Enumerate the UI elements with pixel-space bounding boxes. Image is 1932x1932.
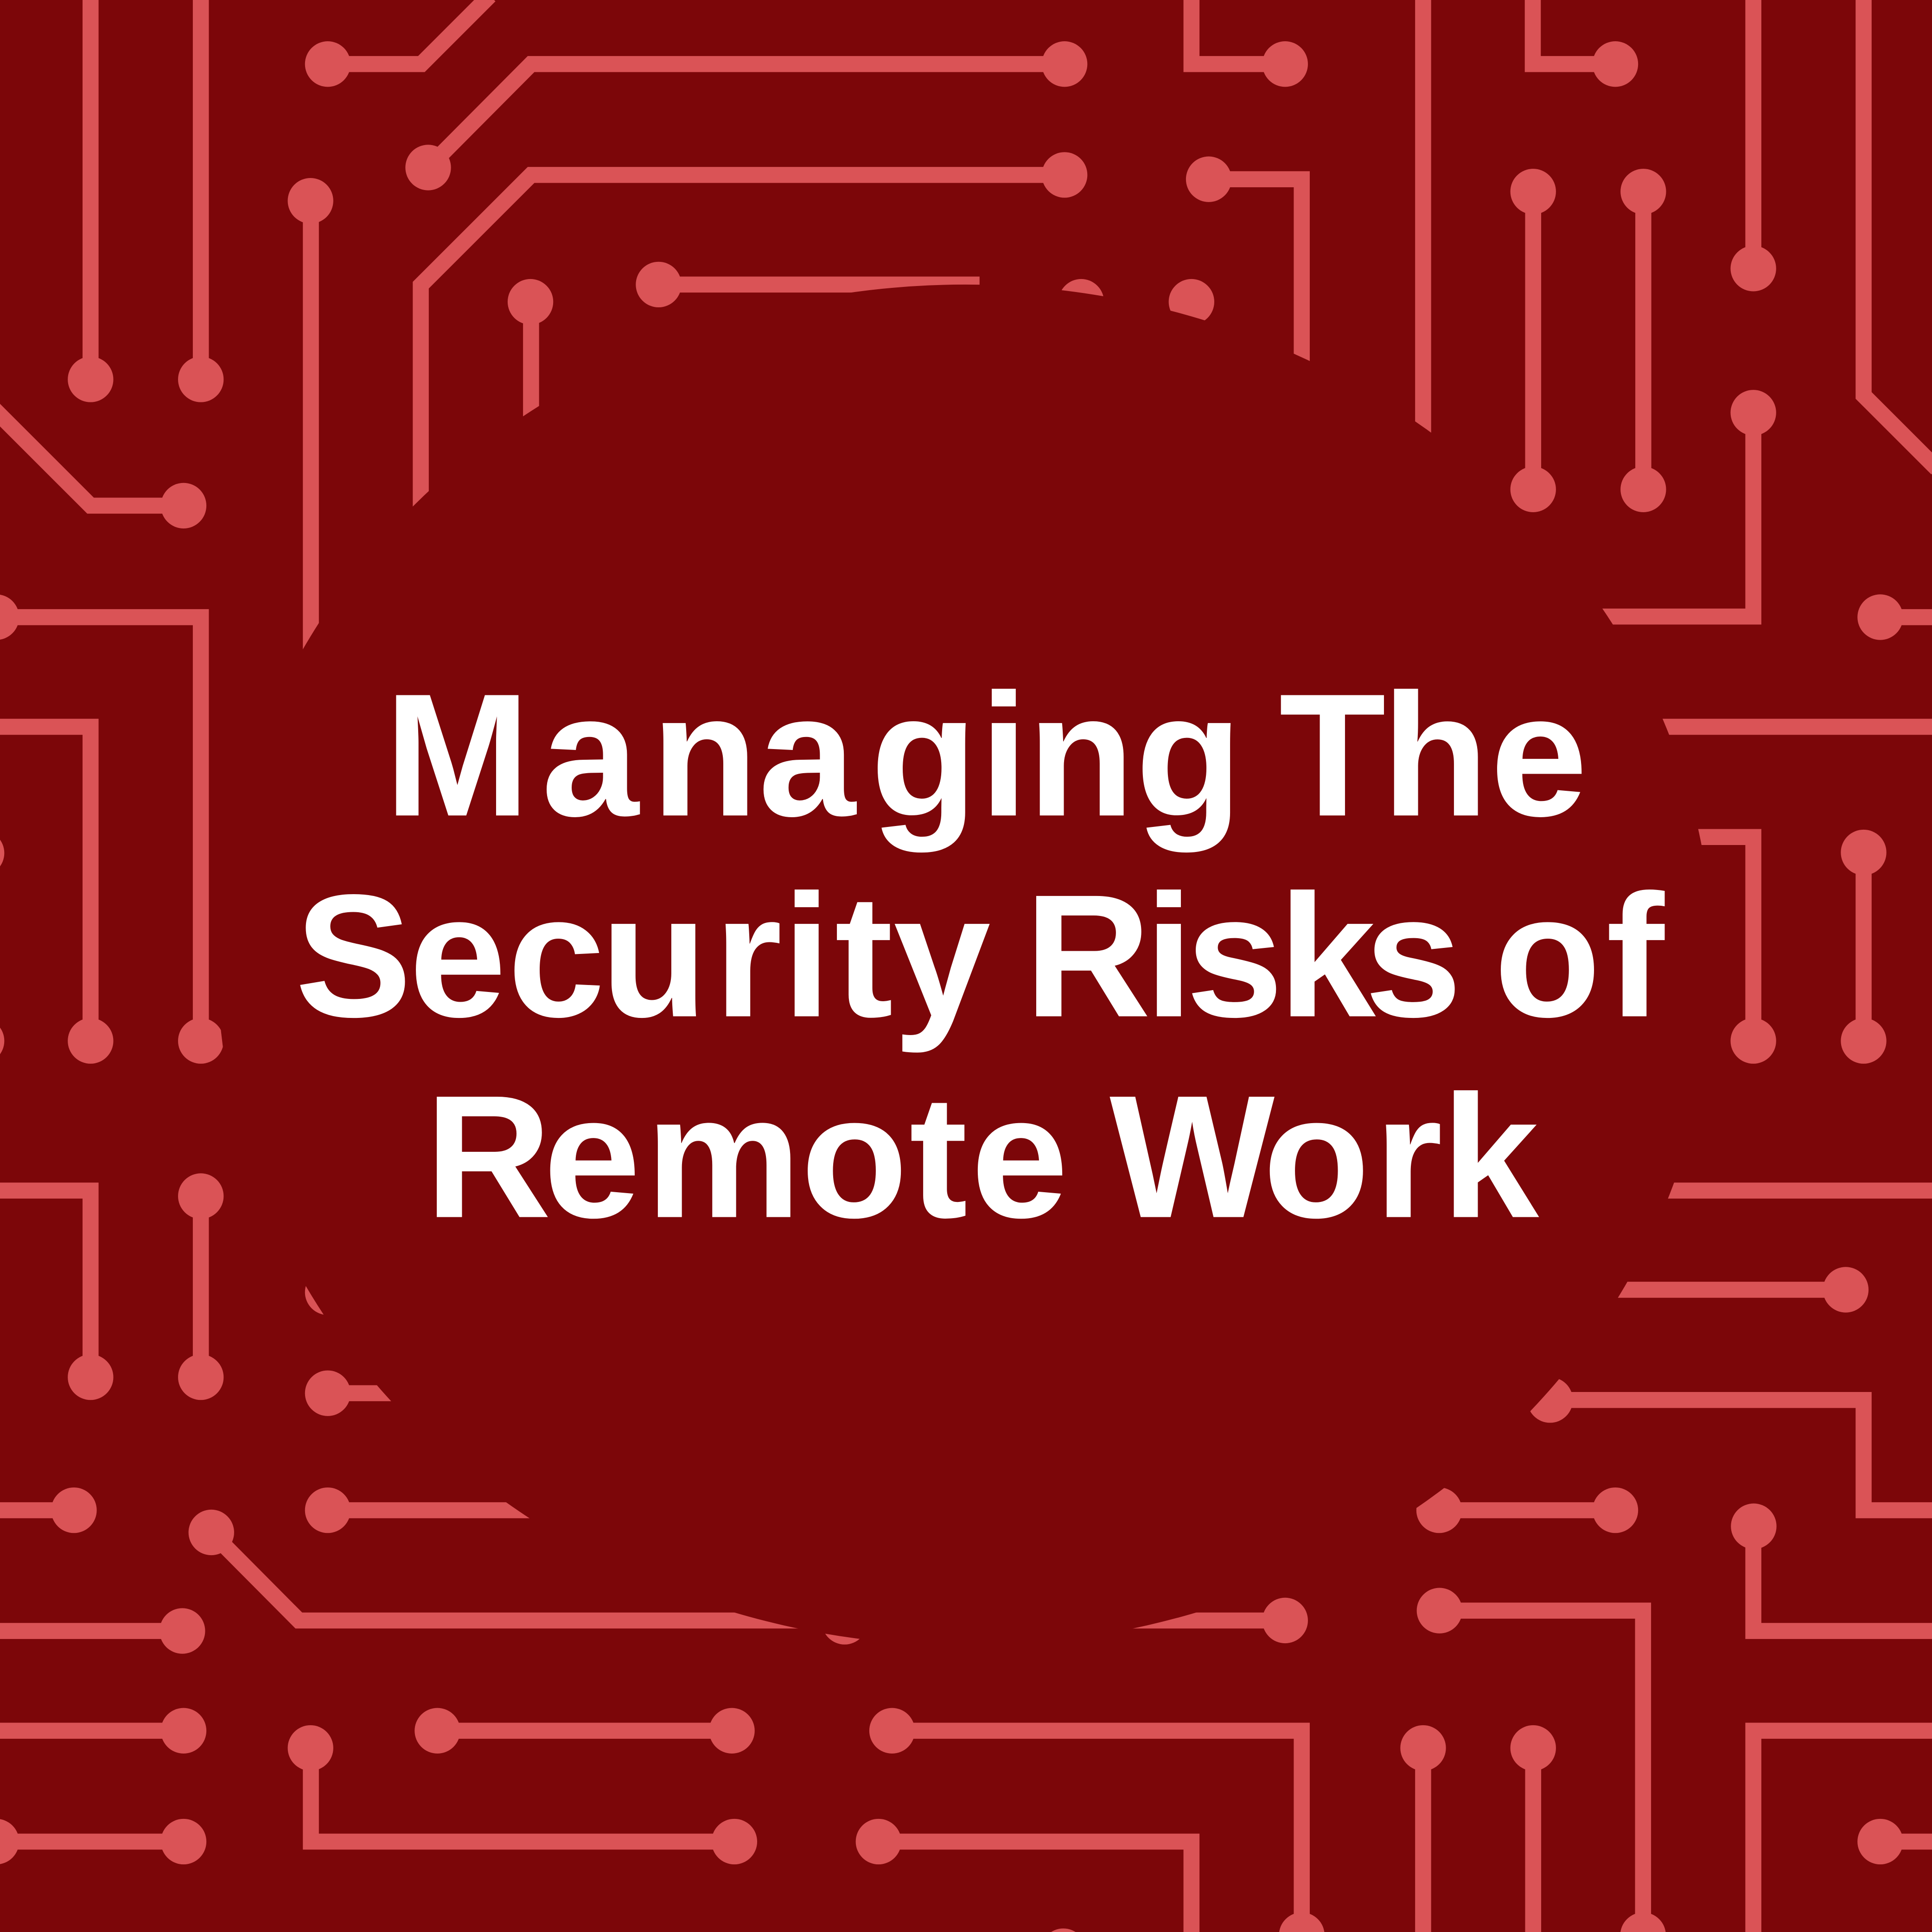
trace: bottom-left double-ended (0, 1819, 206, 1864)
trace: bottom vertical 1 (1400, 1725, 1446, 1932)
node: clipped dot lower left (305, 1270, 351, 1315)
trace: right elbow down (1602, 837, 1776, 1064)
trace: right elbow to centre (1516, 390, 1776, 616)
trace: clipped stub lower left 1 (305, 1370, 493, 1416)
trace: lower right double-ended (1416, 1487, 1638, 1533)
trace: left large elbow (0, 594, 223, 1064)
trace: top vertical clipped (1420, 0, 1426, 517)
trace: left long stub 2 (0, 1708, 206, 1754)
title line 2 (295, 858, 1666, 1055)
trace: top long diagonal 2 (421, 152, 1087, 566)
node: lower end of double-ended vertical 1 (1511, 467, 1556, 512)
trace: bottom elbow right 1 (869, 1708, 1325, 1932)
trace: right step (1527, 1377, 1932, 1510)
trace: top-left vertical 2 (178, 0, 223, 402)
trace: right edge stub 2 (1857, 1819, 1932, 1864)
title line 2: of (1494, 858, 1666, 1053)
trace: top right vertical (1730, 0, 1776, 292)
trace: top right elbow down (1186, 157, 1302, 431)
trace: double-ended vertical 1 (1511, 169, 1556, 489)
trace: bottom long diagonal (189, 1510, 1308, 1643)
trace: lower right elbow (1417, 1588, 1666, 1932)
title line 3: Work (1109, 1059, 1540, 1254)
title line 3 (425, 1059, 1540, 1254)
trace: top short diagonal (305, 0, 490, 87)
trace: right edge stub 1 (1857, 594, 1932, 640)
trace: right horizontal 2 (1540, 1188, 1932, 1194)
node: clipped top dot 2 (1169, 279, 1214, 324)
trace: far right diagonal (1864, 0, 1932, 469)
trace: left stub (0, 1487, 97, 1533)
trace: right horizontal 1 (1540, 724, 1932, 730)
node: clipped top dot 1 (1058, 279, 1104, 324)
trace: bottom right corner (1753, 1731, 1932, 1932)
title line 2: Security (295, 858, 992, 1055)
title line 2: Risks (1025, 858, 1462, 1053)
title line 3: Remote (425, 1059, 1068, 1254)
trace: bottom double-ended horizontal (414, 1708, 755, 1754)
trace: top elbow 2 (1533, 0, 1638, 87)
trace: bottom vertical 2 (1511, 1725, 1556, 1932)
trace: bottom elbow up (288, 1725, 757, 1864)
trace: left diagonal (0, 409, 206, 528)
trace: left long stub 1 (0, 1608, 205, 1654)
trace: lower right elbow to edge (1731, 1504, 1932, 1631)
trace: lower left elbow (0, 1190, 113, 1400)
trace: short vertical under title top (508, 279, 553, 493)
node: clipped dot bottom centre (822, 1599, 867, 1645)
title (295, 657, 1666, 1254)
trace: right clipped stub (1540, 1267, 1868, 1313)
trace: top long diagonal 1 (405, 41, 1087, 191)
trace: top centre horizontal (636, 262, 980, 307)
trace: left inner elbow (0, 727, 113, 1064)
title line 1: The (1279, 657, 1588, 852)
trace: right double-ended (1841, 830, 1887, 1064)
trace: bottom elbow right 2 (856, 1819, 1192, 1932)
node: left edge dot 1 (0, 830, 4, 876)
trace: top-left vertical 1 (68, 0, 113, 402)
trace: top elbow 1 (1192, 0, 1308, 87)
node: left edge dot 2 (0, 1018, 4, 1064)
centre mask ellipse (217, 285, 1713, 1646)
trace: left inner vertical (288, 178, 333, 739)
trace: clipped stub lower left 2 (305, 1487, 616, 1533)
trace: double-ended vertical 2 (1620, 169, 1666, 512)
title line 1: Managing (384, 657, 1242, 854)
trace: lower left double-ended (178, 1173, 223, 1400)
